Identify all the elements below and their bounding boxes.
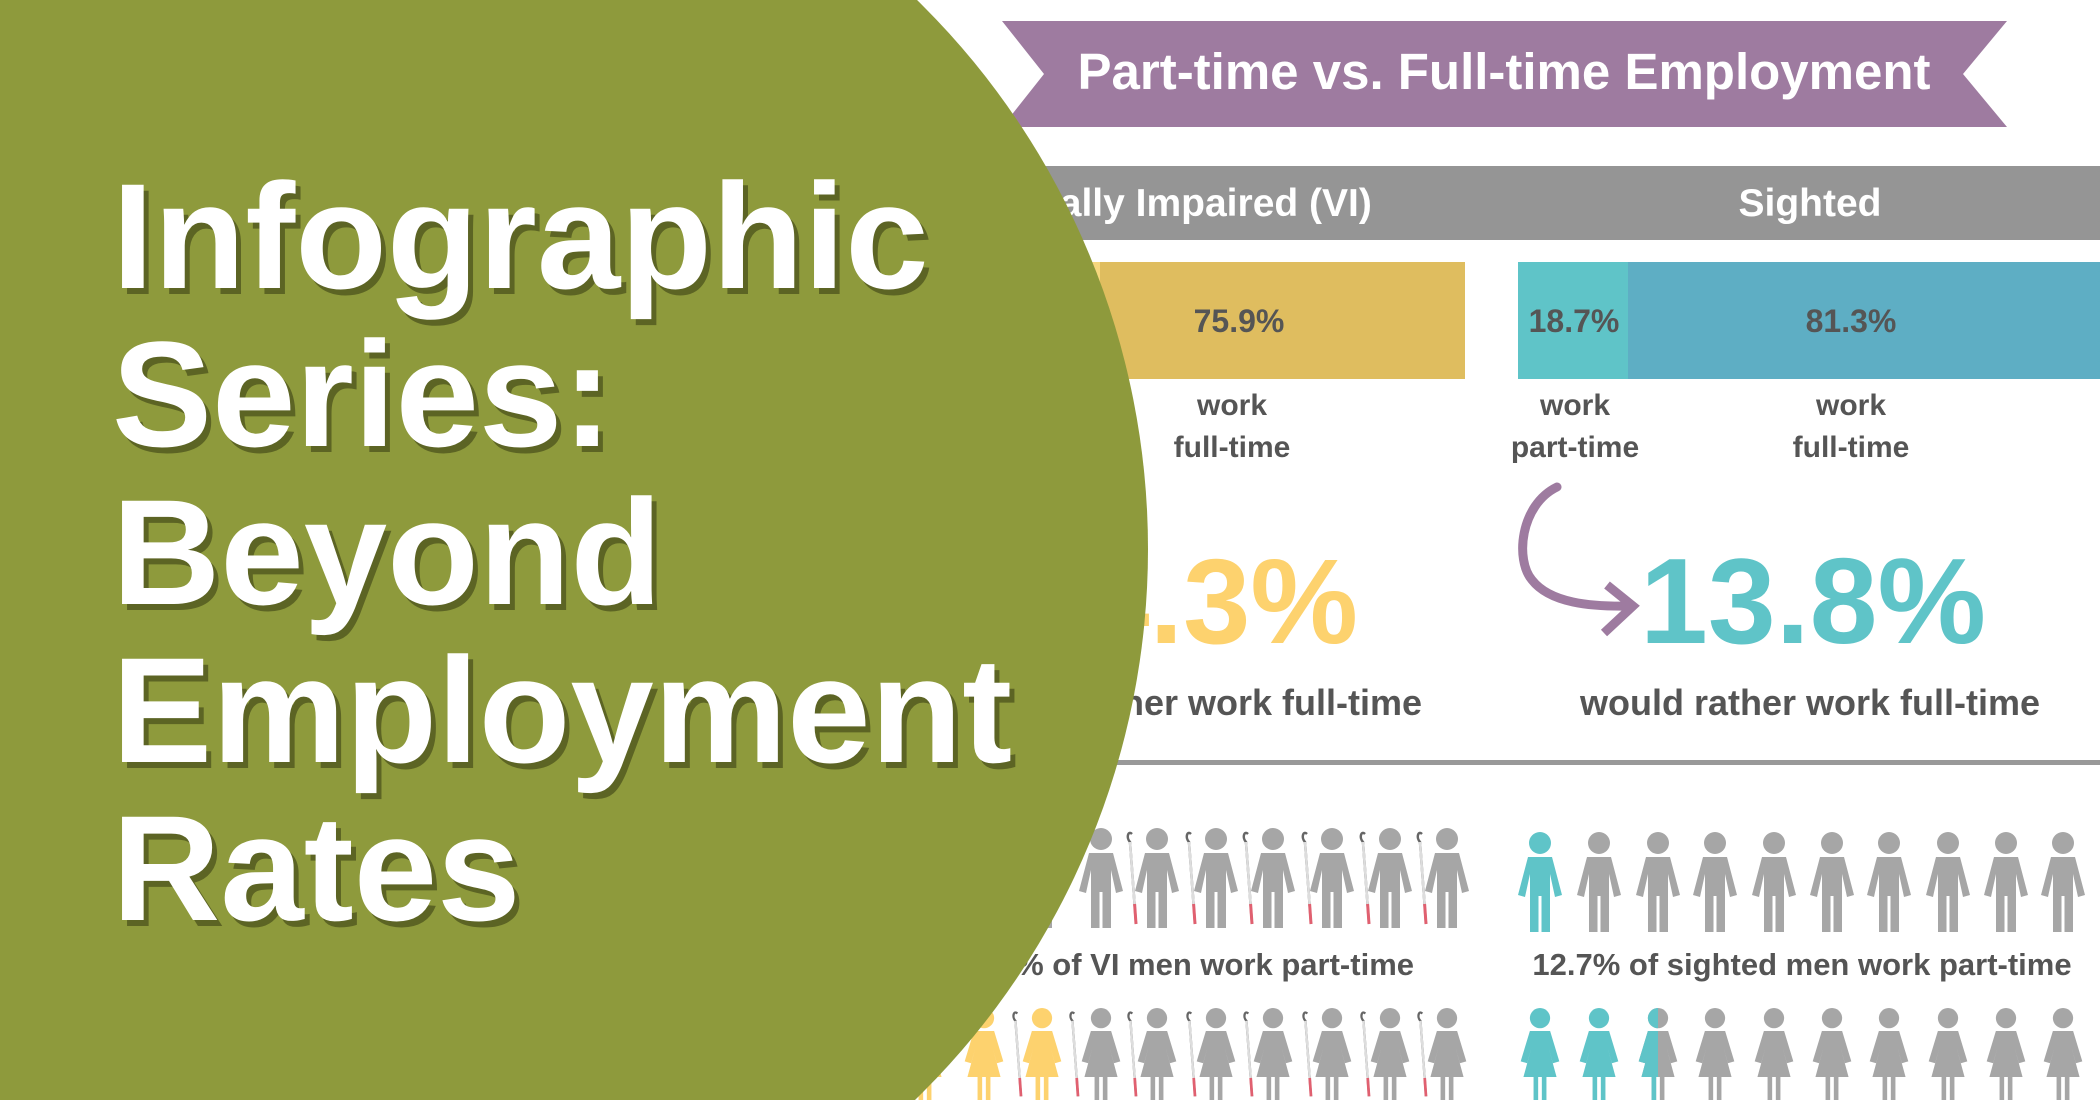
bar: sighted employment: work — [1539, 389, 1610, 422]
header bar: groups — [900, 166, 2100, 240]
bar: VI employment: work — [1196, 389, 1267, 422]
arrow: purple curved — [1523, 487, 1633, 633]
main title: Employment — [112, 626, 1012, 794]
header bar: groups: Sighted — [1738, 182, 1882, 225]
banner: title: Part-time vs. Full-time Employment — [1077, 43, 1931, 100]
bar: sighted employment: 18.7% — [1529, 303, 1619, 339]
main title: Rates — [112, 784, 521, 952]
main title: Infographic — [117, 158, 934, 326]
bar: sighted employment: full-time — [1793, 431, 1909, 464]
main title: Employment — [117, 632, 1017, 800]
bar: sighted employment: 81.3% — [1806, 303, 1896, 339]
divider — [900, 760, 2100, 765]
bar: VI employment — [900, 262, 1465, 464]
main title: Infographic — [112, 152, 929, 320]
caption: VI men: 17.3% of VI men work part-time — [956, 947, 1414, 982]
stat: sighted would rather work full-time — [1579, 533, 2040, 723]
bar: VI employment: full-time — [1174, 431, 1290, 464]
stat: sighted would rather work full-time: 13.8% — [1640, 533, 1986, 669]
main title: Beyond — [117, 474, 667, 642]
bar: sighted employment — [1511, 262, 2100, 464]
stat: VI would rather work full-time: 24.3% — [1015, 533, 1358, 669]
stat: VI would rather work full-time: would rather work full-time — [961, 682, 1422, 723]
main title: Rates — [117, 790, 526, 958]
main title — [112, 152, 1017, 958]
stat: VI would rather work full-time — [961, 533, 1422, 723]
pictogram: sighted women — [1521, 1008, 2082, 1100]
stat: sighted would rather work full-time: would rather work full-time — [1579, 682, 2040, 723]
green circle panel — [0, 0, 1148, 1100]
main title: Series: — [112, 310, 612, 478]
header bar: groups: Visually Impaired (VI) — [978, 182, 1372, 225]
pictogram: VI men — [903, 828, 1469, 928]
pictogram: VI women — [906, 1008, 1466, 1100]
bar: VI employment: 75.9% — [1194, 303, 1284, 339]
pictogram: sighted men — [1518, 832, 2085, 932]
main title: Beyond — [112, 468, 662, 636]
banner: title — [1002, 21, 2007, 127]
bar: sighted employment: work — [1815, 389, 1886, 422]
bar: sighted employment: part-time — [1511, 431, 1639, 464]
caption: sighted men: 12.7% of sighted men work part-time — [1532, 947, 2072, 982]
main title: Series: — [117, 316, 617, 484]
